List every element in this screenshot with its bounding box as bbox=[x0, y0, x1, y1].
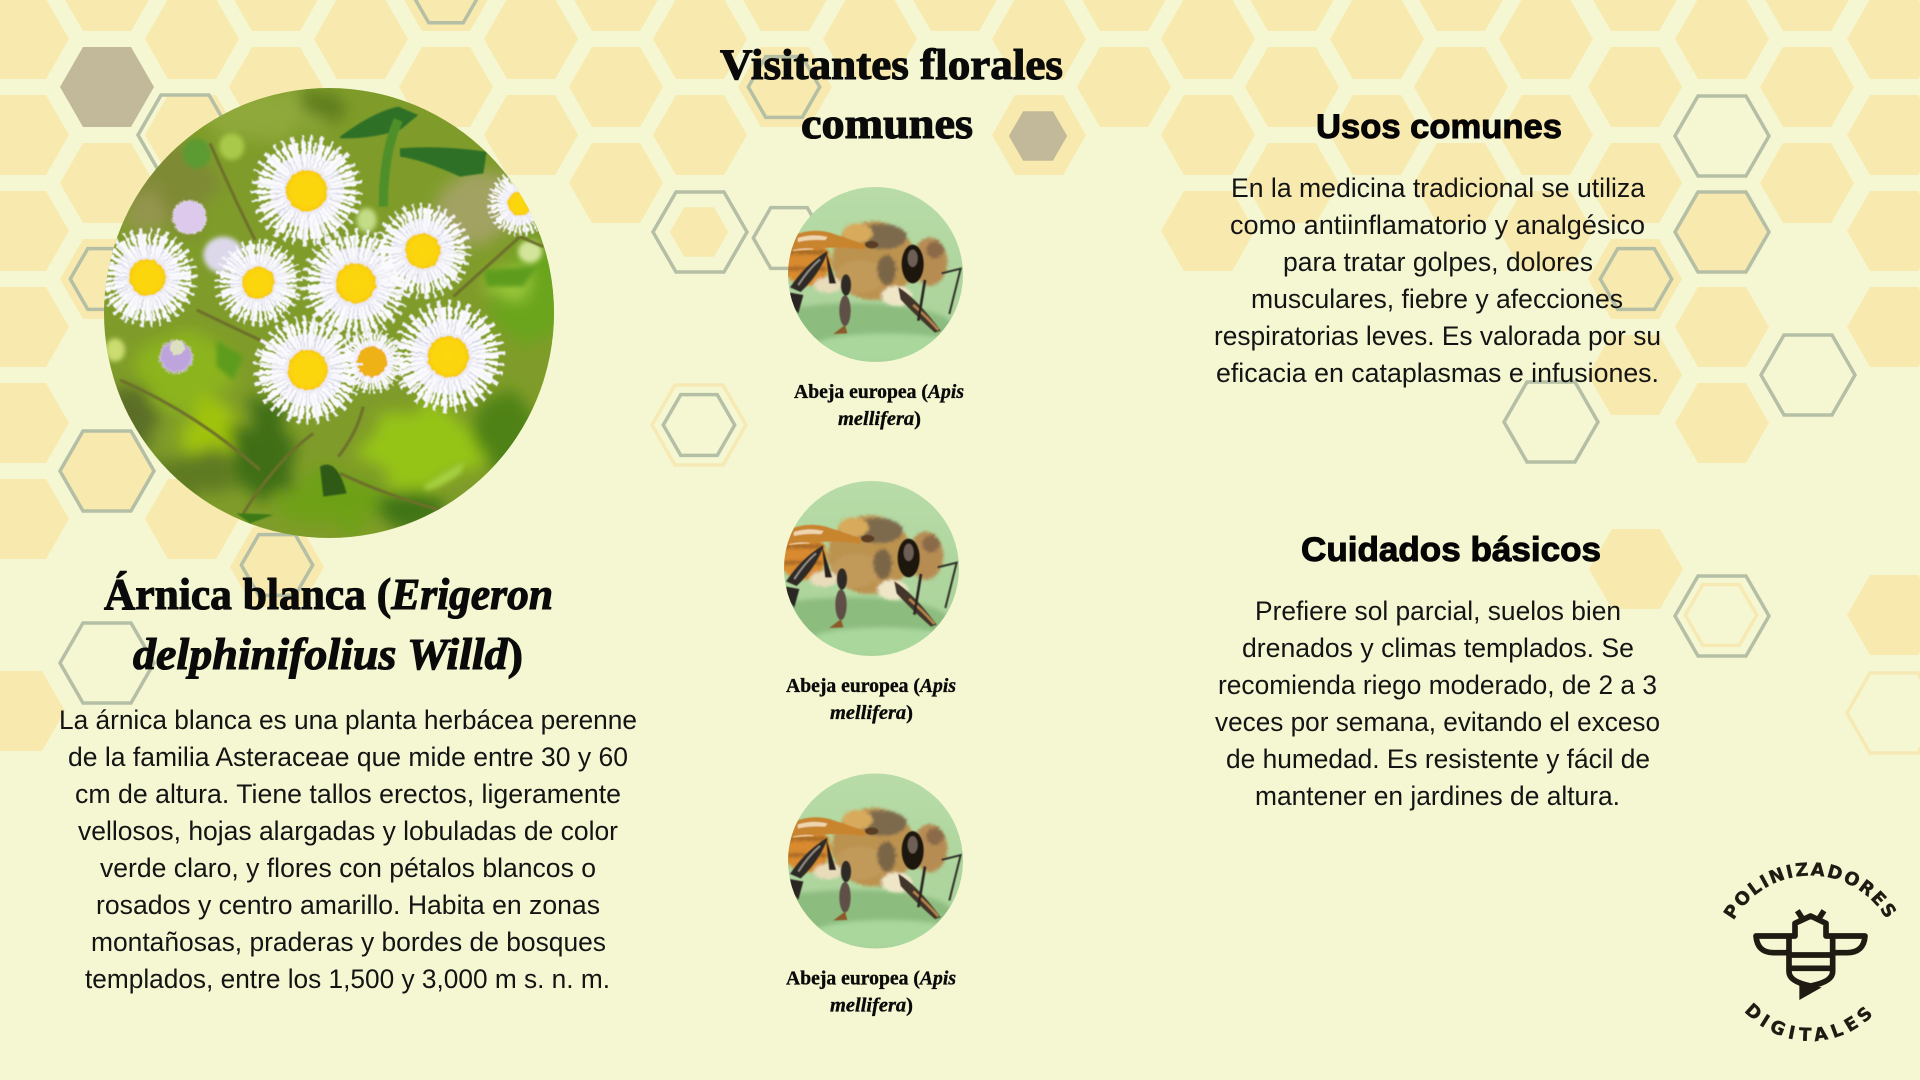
visitor card 2 bbox=[749, 477, 966, 724]
text block: basic care: mantener en jardines de altura. bbox=[1255, 781, 1620, 811]
heading: basic care: Cuidados básicos bbox=[1301, 531, 1601, 569]
text block: plant description: templados, entre los 1,500 y 3,000 m s. n. m. bbox=[85, 964, 610, 994]
title: plant name: delphinifolius Willd ) bbox=[133, 630, 523, 679]
heading: floral visitors bbox=[720, 42, 1063, 148]
heading: floral visitors: Visitantes florales bbox=[720, 42, 1063, 89]
caption: bee 1 bbox=[794, 382, 964, 430]
title: plant name bbox=[104, 570, 553, 679]
caption: bee 3: Abeja europea (Apis bbox=[786, 968, 956, 990]
caption: bee 2: mellifera) bbox=[830, 703, 913, 724]
text block: common uses: como antiinflamatorio y analgésico bbox=[1230, 210, 1645, 240]
visitor card 3 bbox=[753, 770, 970, 1016]
background honeycomb bbox=[0, 0, 1920, 753]
text block: common uses: En la medicina tradicional se utiliza bbox=[1231, 173, 1645, 203]
text block: common uses: para tratar golpes, dolores bbox=[1283, 247, 1593, 277]
text block: plant description: vellosos, hojas alargadas y lobuladas de color bbox=[78, 816, 618, 846]
text block: common uses: musculares, fiebre y afecciones bbox=[1251, 284, 1623, 314]
caption: bee 1: Abeja europea (Apis bbox=[794, 382, 964, 403]
logo: Polinizadores Digitales: POLINIZADORES bbox=[1723, 862, 1896, 920]
text block: common uses: respiratorias leves. Es valorada por su bbox=[1214, 321, 1661, 351]
text block: basic care: recomienda riego moderado, de 2 a 3 bbox=[1218, 670, 1657, 700]
caption: bee 1: mellifera) bbox=[838, 409, 921, 430]
text block: basic care: Prefiere sol parcial, suelos bien bbox=[1255, 596, 1621, 626]
caption: bee 2: Abeja europea (Apis bbox=[786, 676, 956, 697]
logo: Polinizadores Digitales bbox=[1723, 862, 1896, 1042]
text block: basic care: de humedad. Es resistente y fácil de bbox=[1226, 744, 1650, 774]
photo: white fleabane flowers bbox=[104, 88, 554, 538]
text block: plant description bbox=[59, 705, 637, 994]
text block: basic care: drenados y climas templados. Se bbox=[1242, 633, 1634, 663]
photo: bee 1 bbox=[753, 183, 970, 367]
text block: plant description: cm de altura. Tiene tallos erectos, ligeramente bbox=[75, 779, 621, 809]
heading: floral visitors: comunes bbox=[801, 101, 973, 148]
photo: bee 2 bbox=[749, 477, 966, 661]
heading: common uses: Usos comunes bbox=[1316, 108, 1562, 146]
caption: bee 3: mellifera) bbox=[830, 996, 913, 1016]
text block: plant description: La árnica blanca es una planta herbácea perenne bbox=[59, 705, 637, 735]
text block: plant description: verde claro, y flores con pétalos blancos o bbox=[100, 853, 596, 883]
text block: common uses bbox=[1214, 173, 1661, 388]
title: plant name: Árnica blanca (Erigeron bbox=[104, 570, 553, 619]
text block: plant description: rosados y centro amarillo. Habita en zonas bbox=[96, 890, 600, 920]
text block: plant description: de la familia Asteraceae que mide entre 30 y 60 bbox=[68, 742, 628, 772]
visitor card 1 bbox=[753, 183, 970, 430]
flower heads bbox=[102, 148, 542, 417]
icon: bee emblem bbox=[1756, 911, 1865, 1000]
text block: plant description: montañosas, praderas y bordes de bosques bbox=[91, 927, 606, 957]
text block: basic care bbox=[1215, 596, 1660, 811]
caption: bee 3 bbox=[786, 968, 956, 1016]
caption: bee 2 bbox=[786, 676, 956, 724]
photo: bee 3 bbox=[753, 770, 970, 953]
text block: common uses: eficacia en cataplasmas e infusiones. bbox=[1216, 358, 1659, 388]
text block: basic care: veces por semana, evitando el exceso bbox=[1215, 707, 1660, 737]
logo: Polinizadores Digitales: DIGITALES bbox=[1744, 1002, 1872, 1042]
